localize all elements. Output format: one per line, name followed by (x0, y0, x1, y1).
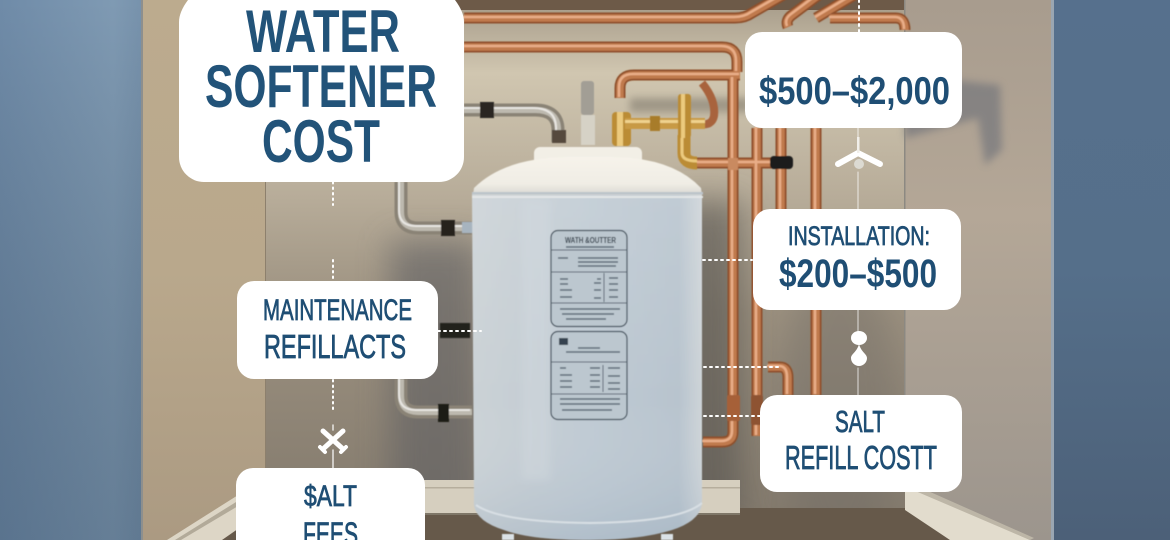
chrome supply pipes (399, 102, 566, 422)
callout: installation cost (753, 209, 961, 310)
title text: SOFTENER (205, 53, 437, 120)
spec label upper (551, 230, 627, 326)
spec label upper: WATH &OUTTER (565, 236, 616, 245)
callout: salt fees: $ALT (304, 480, 357, 513)
title text: COST (262, 108, 380, 175)
callout: maintenance: REFILLACTS (264, 328, 406, 365)
callout: salt fees (236, 468, 425, 540)
callout: maintenance (237, 281, 438, 379)
icon: water drop (851, 331, 867, 366)
price callout: system cost: $500–$2,000 (759, 70, 950, 113)
floor and baseboards (167, 478, 1034, 540)
callout: installation cost: $200–$500 (779, 252, 937, 296)
copper pipe network (463, 0, 905, 442)
tank dome and cap (534, 147, 642, 169)
tank feet (502, 534, 514, 540)
callout: installation cost: INSTALLATION: (788, 221, 930, 251)
spec label lower (551, 332, 627, 420)
water softener tank (472, 147, 703, 540)
brass manifold (612, 94, 705, 163)
callout: salt refill cost (760, 395, 962, 492)
callout: salt refill cost: REFILL COSTT (785, 439, 937, 476)
price callout: system cost (745, 32, 962, 128)
title card (179, 0, 464, 182)
icon: crossed tools (320, 431, 346, 452)
tank body (472, 192, 702, 540)
title text: WATER (246, 0, 400, 65)
callout: salt refill cost: SALT (835, 404, 885, 439)
icon: wrench chevron and filter (838, 137, 880, 169)
callout: maintenance: MAINTENANCE (263, 294, 412, 327)
dotted connector lines (333, 0, 859, 468)
title text (205, 0, 437, 175)
